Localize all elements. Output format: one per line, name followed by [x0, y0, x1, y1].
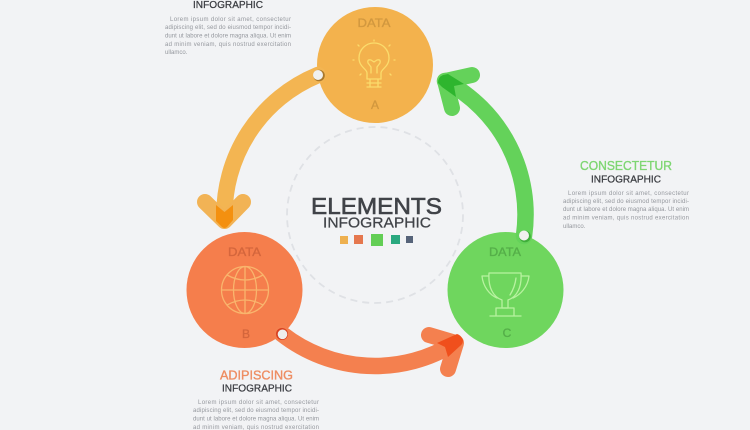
- text block: top left: dunt ut labore et dolore magna aliqua. Ut enim: [165, 34, 291, 40]
- text block: adipiscing: ADIPISCING: [220, 368, 293, 382]
- text block: consectetur: CONSECTETUR: [580, 159, 672, 173]
- text block: consectetur: INFOGRAPHIC: [591, 174, 661, 186]
- text block: consectetur: dunt ut labore et dolore magna aliqua. Ut enim: [563, 207, 689, 213]
- title: elements infographic: ELEMENTS: [311, 193, 442, 219]
- text block: consectetur: [563, 159, 689, 230]
- circle A: A: [371, 98, 379, 112]
- arrow: C to A: [438, 74, 526, 236]
- connector dot B: [276, 328, 288, 340]
- text block: adipiscing: dunt ut labore et dolore magna aliqua. Ut enim: [193, 416, 319, 422]
- arrow: A to B: [205, 75, 318, 228]
- text block: top left: Lorem ipsum dolor sit amet, consectetur: [170, 17, 291, 23]
- connector dot A: [313, 70, 325, 81]
- connector dot C: [519, 230, 531, 242]
- circle B: [186, 232, 302, 348]
- color legend squares: [340, 234, 413, 246]
- icon: light bulb: [353, 40, 395, 87]
- circle B: DATA: [228, 245, 261, 259]
- circle C: C: [503, 326, 512, 340]
- circle A: DATA: [358, 16, 390, 30]
- icon: trophy: [482, 273, 529, 316]
- text block: consectetur: ad minim veniam, quis nostrud exercitation: [563, 216, 689, 222]
- text block: top left: adipiscing elit, sed do eiusmod tempor incidi-: [165, 25, 291, 31]
- circle C: [448, 232, 564, 348]
- icon: globe: [222, 266, 268, 314]
- text block: adipiscing: adipiscing elit, sed do eiusmod tempor incidi-: [193, 408, 319, 414]
- title: elements infographic: INFOGRAPHIC: [323, 216, 431, 232]
- text block: consectetur: ullamco.: [563, 224, 586, 230]
- text block: adipiscing: INFOGRAPHIC: [222, 382, 292, 394]
- title: elements infographic: [311, 193, 442, 232]
- text block: top left: ad minim veniam, quis nostrud exercitation: [165, 42, 291, 48]
- arrow: B to C: [282, 334, 463, 369]
- text block: adipiscing: [193, 368, 319, 430]
- text block: adipiscing: Lorem ipsum dolor sit amet, consectetur: [198, 400, 319, 406]
- circle C: DATA: [489, 245, 521, 259]
- text block: consectetur: adipiscing elit, sed do eiusmod tempor incidi-: [563, 199, 689, 205]
- circle B: B: [242, 327, 250, 341]
- dashed center ring: [287, 127, 463, 303]
- circle A: [317, 7, 433, 123]
- text block: consectetur: Lorem ipsum dolor sit amet, consectetur: [568, 191, 689, 197]
- text block: top left: [165, 0, 291, 56]
- text block: top left: ullamco.: [165, 50, 188, 56]
